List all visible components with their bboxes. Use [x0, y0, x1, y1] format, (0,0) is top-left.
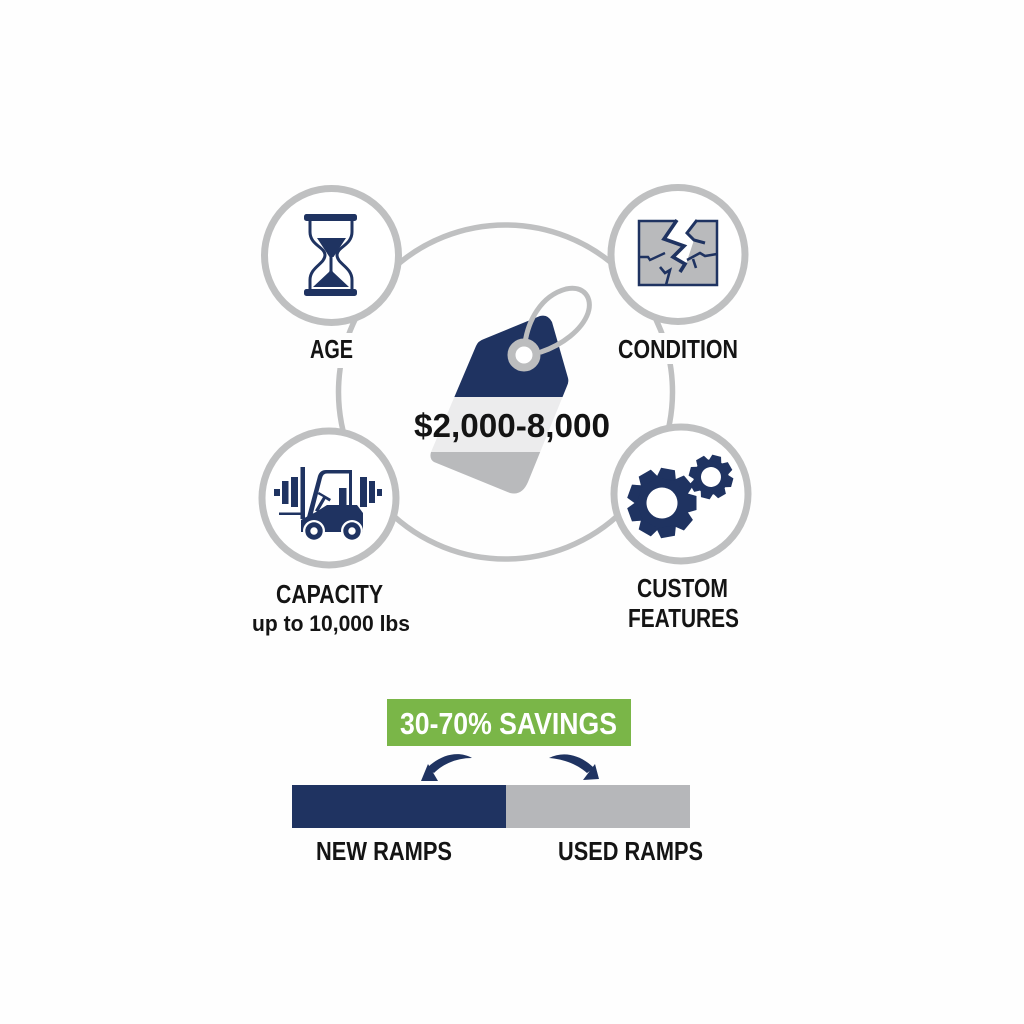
price range: $2,000-8,000 [414, 407, 610, 444]
icon: cracked surface [639, 219, 717, 285]
age circle [264, 188, 398, 322]
tag eyelet [512, 342, 536, 368]
factor: custom features [614, 427, 748, 633]
savings comparison [292, 699, 703, 866]
age label: AGE [310, 334, 353, 364]
icon: hourglass [304, 214, 357, 296]
custom features label [628, 573, 739, 633]
arrow: toward new ramps [421, 754, 472, 781]
custom features label: CUSTOM [637, 573, 728, 603]
tag body bands [430, 316, 568, 494]
tag string loop [525, 288, 589, 352]
icon: gears [621, 450, 738, 544]
factor: age [264, 188, 398, 364]
large gear [621, 463, 703, 544]
price tag [414, 288, 610, 502]
comparison bar [292, 785, 690, 828]
used ramps label: USED RAMPS [558, 836, 703, 866]
new ramps label: NEW RAMPS [316, 836, 452, 866]
connecting ring [338, 225, 672, 559]
custom features circle [614, 427, 748, 561]
custom features label: FEATURES [628, 603, 739, 633]
small gear [684, 450, 738, 504]
condition circle [611, 188, 745, 322]
infographic [253, 184, 752, 860]
savings badge: 30-70% SAVINGS [400, 706, 617, 741]
factor: condition [611, 188, 745, 364]
savings badge [387, 699, 631, 746]
capacity label: CAPACITY [276, 579, 383, 609]
capacity circle [262, 431, 396, 565]
icon: forklift with weights [274, 467, 382, 542]
condition label: CONDITION [618, 334, 738, 364]
arrow: toward used ramps [549, 754, 599, 780]
factor: capacity [252, 431, 410, 636]
capacity limit: up to 10,000 lbs [252, 611, 410, 636]
